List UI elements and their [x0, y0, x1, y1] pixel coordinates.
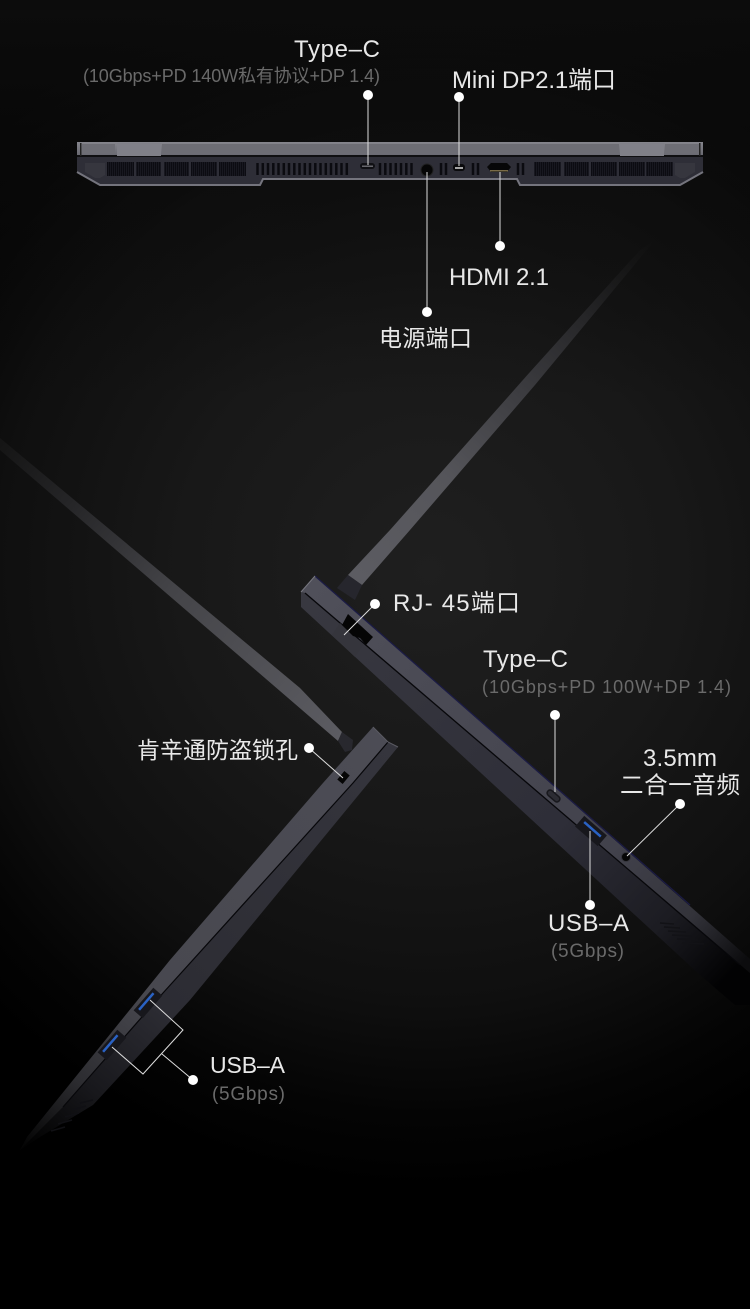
lock slot [337, 771, 350, 784]
callout: power [422, 172, 432, 317]
label: USB-A left: USB–A [210, 1052, 286, 1078]
rear ports [360, 163, 375, 169]
rear lid strip [77, 142, 703, 155]
callout: RJ-45 [344, 599, 380, 635]
rear vents [107, 162, 673, 176]
grille [660, 923, 704, 944]
callout: Mini DP [454, 92, 464, 166]
label: lock: 肯辛通防盗锁孔 [137, 737, 298, 763]
right USB-A port [575, 816, 607, 846]
label: Type-C rear: Type–C [294, 36, 380, 63]
right laptop body [301, 576, 750, 1005]
hinge left [338, 732, 353, 752]
label: audio: 二合一音频 [620, 772, 740, 798]
label: Mini DP: Mini DP2.1端口 [452, 67, 616, 94]
audio jack [622, 852, 630, 862]
label: Type-C rear [83, 36, 380, 86]
callout: HDMI [495, 172, 505, 251]
label: USB-A right [548, 910, 629, 962]
callout: USB-A left [112, 1000, 198, 1085]
label: Type-C side: Type–C [483, 646, 568, 673]
laptop rear view [77, 142, 703, 186]
callout: USB-A right [585, 831, 595, 910]
left laptop body [20, 727, 398, 1150]
label: Type-C rear: (10Gbps+PD 140W私有协议+DP 1.4) [83, 66, 380, 86]
label: audio: 3.5mm [643, 745, 717, 772]
callout: Type-C side [550, 710, 560, 792]
label: Type-C side [482, 646, 731, 697]
callout: Type-C rear [363, 90, 373, 165]
label: USB-A right: (5Gbps) [551, 941, 624, 962]
left USB-A ports [98, 988, 162, 1060]
label: USB-A left [210, 1052, 286, 1105]
rear slots [258, 163, 523, 175]
hinge right [337, 575, 362, 600]
RJ-45 port [332, 614, 373, 657]
label: USB-A right: USB–A [548, 910, 629, 937]
label: USB-A left: (5Gbps) [212, 1084, 285, 1105]
label: Type-C side: (10Gbps+PD 100W+DP 1.4) [482, 677, 731, 697]
label: audio [620, 745, 740, 798]
grille [51, 1100, 93, 1131]
right Type-C port [546, 789, 561, 803]
callout: audio [627, 799, 685, 856]
label: RJ-45: RJ- 45端口 [393, 590, 520, 617]
left laptop lid [0, 438, 353, 752]
rear base [77, 157, 703, 186]
label: power: 电源端口 [379, 325, 472, 351]
callout: lock [304, 743, 343, 778]
label: HDMI: HDMI 2.1 [449, 264, 549, 291]
right laptop lid [337, 240, 655, 600]
